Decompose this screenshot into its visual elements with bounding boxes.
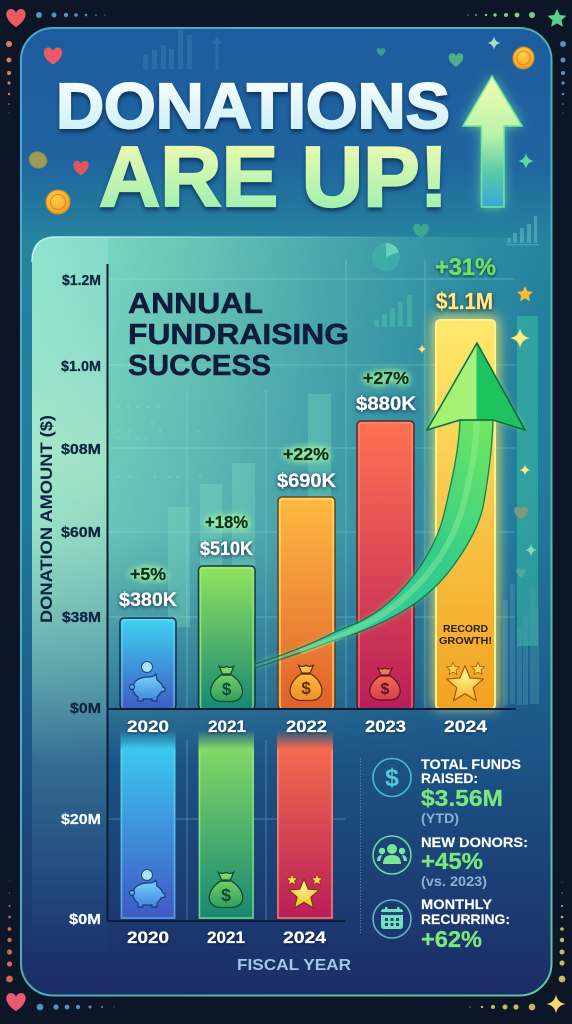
chart subtitle xyxy=(128,288,349,382)
label 2022: $690K xyxy=(277,471,336,492)
record growth note: GROWTH! xyxy=(439,635,492,647)
stat: monthly recurring: +62% xyxy=(421,926,482,952)
stat: total funds: $ xyxy=(385,764,399,792)
background chart icons xyxy=(372,243,539,705)
label 2020 xyxy=(119,564,177,611)
lower bar 2024 xyxy=(277,730,333,919)
y axis labels: $1.2M xyxy=(62,273,101,289)
stat: monthly recurring: MONTHLY xyxy=(421,896,493,912)
lower bars xyxy=(120,730,333,919)
y axis labels: $38M xyxy=(62,610,101,626)
stat: new donors xyxy=(373,834,528,889)
record growth note xyxy=(439,623,492,647)
label 2024: +31% xyxy=(435,254,496,281)
stat: total funds: TOTAL FUNDS xyxy=(421,756,521,772)
stat: new donors: NEW DONORS: xyxy=(421,834,528,850)
stat: total funds: (YTD) xyxy=(421,810,459,826)
x axis year labels: 2021 xyxy=(207,929,245,947)
stat: new donors: (vs. 2023) xyxy=(421,873,487,889)
lower bar 2021: $ xyxy=(221,885,231,905)
lower bar 2020 xyxy=(120,730,176,919)
icon: money bag red: $ xyxy=(381,681,390,698)
stat: monthly recurring: RECURRING: xyxy=(421,911,510,927)
x axis title: FISCAL YEAR xyxy=(237,957,351,974)
title xyxy=(56,70,450,225)
x axis year labels: 2024 xyxy=(444,718,488,736)
y axis labels xyxy=(61,273,101,928)
title: DONATIONS xyxy=(56,70,450,142)
label 2021: $510K xyxy=(200,539,253,560)
stat: total funds xyxy=(373,756,521,826)
stat: new donors: +45% xyxy=(421,848,483,874)
y axis labels: $0M xyxy=(70,701,101,717)
label 2020: $380K xyxy=(119,590,177,611)
x axis year labels: 2021 xyxy=(208,718,246,736)
label 2021: +18% xyxy=(205,512,248,532)
stat: monthly recurring xyxy=(373,896,510,952)
label 2023: $880K xyxy=(356,394,416,415)
x axis year labels: 2022 xyxy=(286,718,327,736)
label 2022: +22% xyxy=(283,444,329,464)
floating decorations xyxy=(26,30,539,246)
y axis labels: $1.0M xyxy=(61,359,101,375)
icon: money bag orange: $ xyxy=(301,678,311,698)
label 2024 xyxy=(435,254,496,314)
x axis year labels: 2023 xyxy=(365,718,406,736)
icon: money bag orange xyxy=(290,665,322,700)
bar 2021 xyxy=(198,566,255,709)
bar 2020 xyxy=(120,618,176,709)
title: ARE UP! xyxy=(99,130,448,225)
lower bar 2021 xyxy=(198,730,254,919)
growth arrow xyxy=(255,343,525,668)
value labels xyxy=(119,254,496,611)
chart subtitle: ANNUAL xyxy=(128,288,263,320)
y axis labels: $0M xyxy=(69,912,101,928)
label 2023: +27% xyxy=(363,368,409,388)
label 2023 xyxy=(356,368,416,415)
x axis year labels: 2020 xyxy=(127,929,169,947)
y axis labels: $60M xyxy=(61,525,101,541)
stat: total funds: $3.56M xyxy=(421,785,503,811)
chart subtitle: SUCCESS xyxy=(128,350,271,382)
icon: money bag red xyxy=(370,668,400,700)
x axis year labels xyxy=(127,718,488,947)
sparkles around 2024 xyxy=(418,286,533,476)
y axis labels: $08M xyxy=(61,442,101,458)
label 2020: +5% xyxy=(130,564,166,584)
label 2021 xyxy=(200,512,253,560)
icon: money bag green xyxy=(211,666,242,702)
x axis year labels: 2024 xyxy=(283,929,327,947)
label 2022 xyxy=(277,444,336,492)
icon: money bag green: $ xyxy=(222,679,232,699)
icon: star xyxy=(447,662,484,701)
chart panel xyxy=(31,236,489,896)
label 2024: $1.1M xyxy=(436,288,493,314)
y axis labels: $20M xyxy=(61,812,101,828)
bar 2022 xyxy=(278,497,335,709)
bar 2023 xyxy=(357,421,414,709)
grid lines xyxy=(108,260,515,921)
icon: glowing up arrow xyxy=(463,76,522,207)
stats panel xyxy=(360,756,528,952)
y axis title: DONATION AMOUNT ($) xyxy=(37,415,56,623)
icon: piggy bank xyxy=(130,662,165,701)
chart subtitle: FUNDRAISING xyxy=(128,319,349,351)
axes xyxy=(107,264,516,921)
stat: total funds: RAISED: xyxy=(421,770,478,786)
record growth note: RECORD xyxy=(443,623,488,635)
bar 2024 xyxy=(432,316,499,709)
x axis year labels: 2020 xyxy=(127,718,169,736)
